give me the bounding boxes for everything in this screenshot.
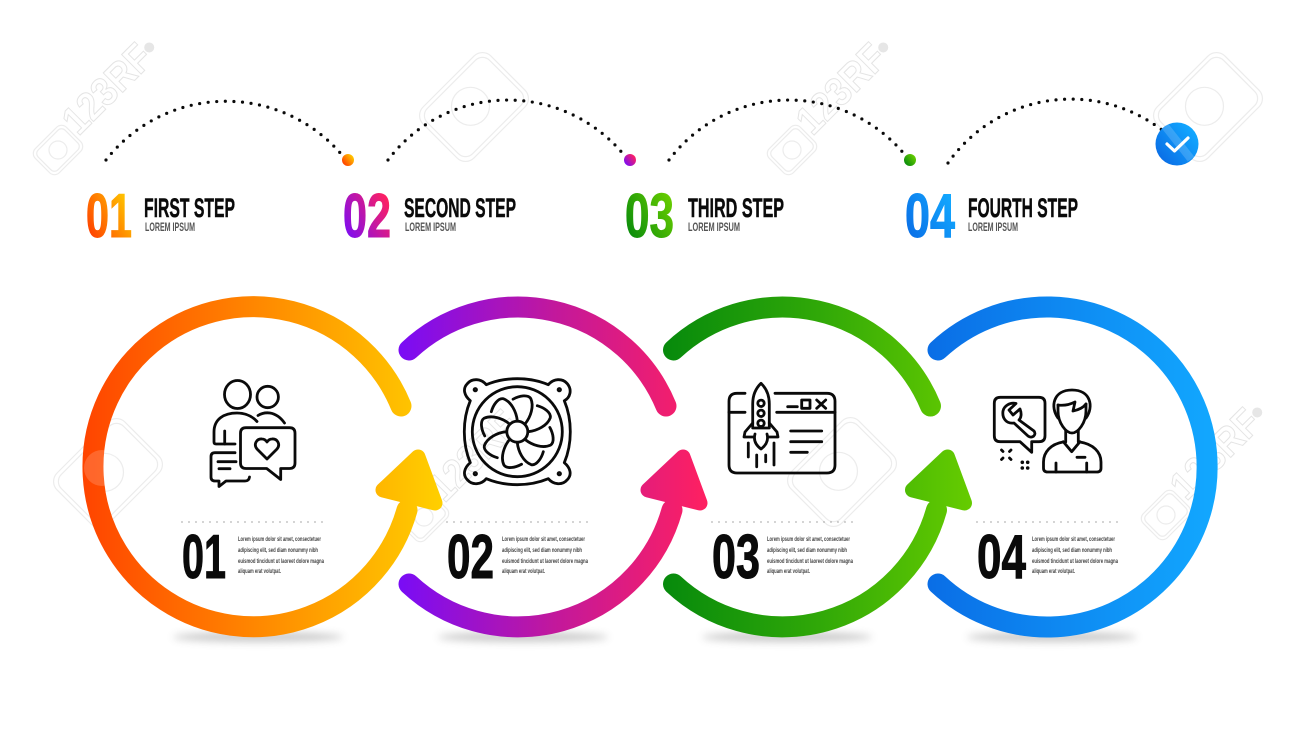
panel: step 2 ring and arrow [409,307,700,627]
text block: step 1 [182,522,324,592]
circle shadows [173,632,1137,642]
icon: couple with heart chat [211,380,295,486]
icon: cooling fan [464,379,570,485]
text block: step 1: euismod tincidunt ut laoreet dolore magna [238,558,324,565]
text block: step 2: adipiscing elit, sed diam nonummy nibh [502,547,582,554]
text block: step 1: Lorem ipsum dolor sit amet, consectetuer [238,536,321,543]
panel: step 4 ring [938,307,1207,627]
watermarks: 123RF [788,35,895,143]
text block: step 2: 02 [447,523,494,592]
step heading 4: 04 [905,182,955,251]
text block: step 3: euismod tincidunt ut laoreet dolore magna [767,558,853,565]
watermarks: 123RF [420,402,527,510]
watermarks: 123RF [54,35,161,143]
panel: step 1 ring and arrow [84,307,435,627]
icon: rocket launch browser window [729,383,835,473]
purple step marker [624,154,636,166]
text block: step 2: aliquam erat volutpat. [502,568,545,575]
text block: step 3 [712,522,854,592]
text block: step 4: aliquam erat volutpat. [1032,568,1075,575]
text block: step 1: aliquam erat volutpat. [238,568,281,575]
text block: step 3: adipiscing elit, sed diam nonummy nibh [767,547,847,554]
text block: step 4: 04 [977,523,1026,592]
step heading 3: 03 [625,182,674,251]
text block: step 4: Lorem ipsum dolor sit amet, consectetuer [1032,536,1115,543]
watermarks [21,28,1278,545]
step heading 4: LOREM IPSUM [968,222,1018,234]
text block: step 2 [447,522,589,592]
step heading 4 [905,182,1078,251]
step heading 3 [625,182,784,251]
step heading 1 [86,182,235,251]
text block: step 2: Lorem ipsum dolor sit amet, consectetuer [502,536,585,543]
step heading 2: LOREM IPSUM [405,222,456,234]
text block: step 3: 03 [712,523,760,592]
text block: step 2: euismod tincidunt ut laoreet dolore magna [502,558,588,565]
step heading 3: THIRD STEP [688,193,784,223]
text block: step 4 [977,522,1118,592]
text block: step 1: 01 [182,523,226,592]
panel: step 3 ring and arrow [674,307,964,627]
dotted arc 2 [388,100,624,160]
icon: blue check badge [1156,122,1198,166]
text block: step 1: adipiscing elit, sed diam nonummy nibh [238,547,318,554]
step heading 4: FOURTH STEP [968,193,1078,223]
green step marker [904,154,916,166]
step heading 2: SECOND STEP [404,193,516,223]
step heading 1: 01 [86,182,132,251]
step heading 1: LOREM IPSUM [145,222,195,234]
dotted arc 3 [669,100,905,160]
orange step marker [342,154,354,166]
text block: step 3: aliquam erat volutpat. [767,568,810,575]
step heading 1: FIRST STEP [144,193,235,223]
icon: support person with wrench [994,390,1101,472]
step heading 2: 02 [343,182,391,251]
watermarks: 123RF [1162,400,1269,508]
text block: step 3: Lorem ipsum dolor sit amet, consectetuer [767,536,850,543]
step heading 2 [343,182,516,251]
text block: step 4: euismod tincidunt ut laoreet dolore magna [1032,558,1118,565]
dotted arc 4 [948,99,1162,163]
step heading 3: LOREM IPSUM [688,222,740,234]
dotted arc 1 [106,101,342,160]
text block: step 4: adipiscing elit, sed diam nonummy nibh [1032,547,1112,554]
